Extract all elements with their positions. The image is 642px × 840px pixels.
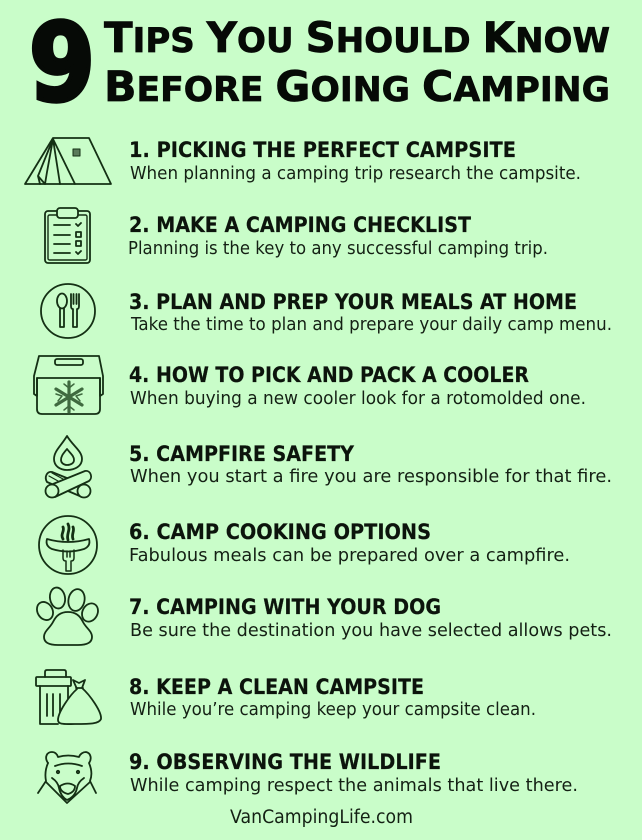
icon: clipboard checklist xyxy=(45,208,90,263)
tip 7 text: 7. CAMPING WITH YOUR DOG xyxy=(129,595,441,620)
tip 4 text xyxy=(129,363,586,409)
tip 4 text: When buying a new cooler look for a rotomolded one. xyxy=(130,389,586,409)
icon: plate with spoon and fork xyxy=(41,284,95,338)
tip 6 text xyxy=(129,520,570,566)
tip 1 text: When planning a camping trip research the campsite. xyxy=(130,164,581,184)
tip 1 text: 1. PICKING THE PERFECT CAMPSITE xyxy=(129,138,516,163)
tip 3 text xyxy=(129,290,612,335)
tip 2 text: 2. MAKE A CAMPING CHECKLIST xyxy=(129,213,471,238)
tip 7 text xyxy=(129,595,612,641)
icon: sausage on a fork xyxy=(39,516,97,574)
footer website: VanCampingLife.com xyxy=(230,807,413,828)
icon: cooler xyxy=(34,356,103,414)
tip 8 text: 8. KEEP A CLEAN CAMPSITE xyxy=(129,675,424,700)
tip 8 text xyxy=(129,675,536,720)
tip 6 text: 6. CAMP COOKING OPTIONS xyxy=(129,520,431,545)
icon: paw print xyxy=(34,586,101,645)
icon: tent xyxy=(25,138,111,184)
tip 2 text xyxy=(128,213,548,259)
tip 5 text xyxy=(129,442,612,487)
tip 3 text: Take the time to plan and prepare your daily camp menu. xyxy=(130,315,612,335)
tip 1 text xyxy=(129,138,581,184)
title line 1: TIPS YOU SHOULD KNOW xyxy=(104,13,610,62)
tip 5 text: When you start a fire you are responsible for that fire. xyxy=(130,467,612,487)
icon: trash can and bag xyxy=(36,670,101,724)
title xyxy=(29,2,610,126)
title line 2: BEFORE GOING CAMPING xyxy=(104,62,610,111)
tip 9 text: 9. OBSERVING THE WILDLIFE xyxy=(129,750,441,775)
icon: bear face xyxy=(38,752,96,803)
tip 9 text xyxy=(129,750,578,796)
tip 6 text: Fabulous meals can be prepared over a campfire. xyxy=(129,546,570,566)
tip 3 text: 3. PLAN AND PREP YOUR MEALS AT HOME xyxy=(129,290,577,315)
tip 7 text: Be sure the destination you have selected allows pets. xyxy=(130,621,612,641)
tip 8 text: While you’re camping keep your campsite clean. xyxy=(130,700,536,720)
tip 2 text: Planning is the key to any successful camping trip. xyxy=(128,239,548,259)
tip 5 text: 5. CAMPFIRE SAFETY xyxy=(129,442,354,467)
tip 9 text: While camping respect the animals that live there. xyxy=(130,776,578,796)
icon: campfire xyxy=(46,436,91,498)
big number 9: 9 xyxy=(29,2,95,126)
tip 4 text: 4. HOW TO PICK AND PACK A COOLER xyxy=(129,363,529,388)
